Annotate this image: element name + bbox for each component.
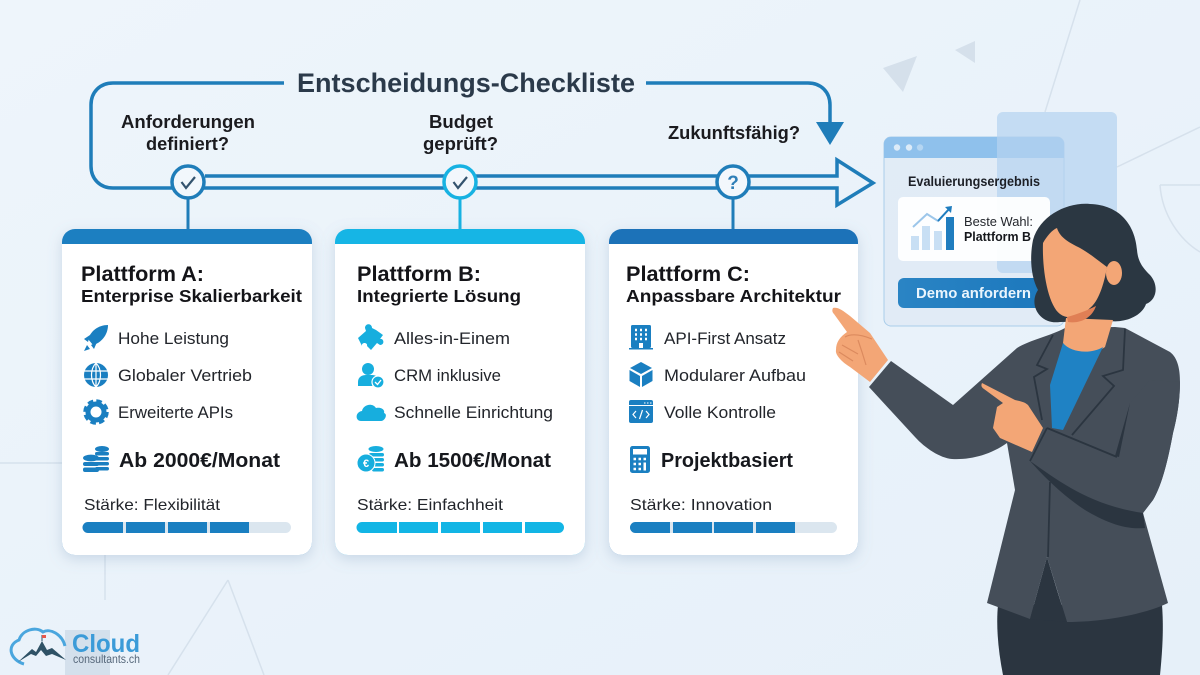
face [1043, 228, 1107, 317]
icon: globe [84, 363, 108, 387]
panel: Plattform C [609, 229, 858, 555]
feature list A: Globaler Vertrieb [118, 366, 252, 385]
icon: coins [83, 446, 109, 472]
icon: cloud with mountain [11, 629, 66, 664]
icon: euro coins: € [363, 458, 369, 470]
title: Entscheidungs-Checkliste [297, 68, 635, 98]
feature list B [394, 329, 553, 422]
jacket dart [1115, 403, 1130, 457]
flow: decision checklist [91, 68, 873, 230]
strength bar A [82, 522, 291, 533]
step 2: budget checked: geprüft? [423, 134, 498, 154]
jacket [869, 327, 1180, 622]
hair back [1031, 204, 1156, 322]
icon: euro coins [357, 446, 384, 472]
strength C: Stärke: Innovation [630, 497, 772, 514]
strength B: Stärke: Einfachheit [357, 497, 504, 514]
strength A: Stärke: Flexibilität [84, 497, 221, 514]
heading C: Plattform C: [626, 263, 750, 286]
feature list C: Modularer Aufbau [664, 366, 806, 385]
heading B: Integrierte Lösung [357, 286, 521, 306]
logo text: Cloud [72, 630, 140, 658]
feature list B: Alles-in-Einem [394, 329, 510, 348]
window heading: Evaluierungsergebnis [908, 174, 1040, 189]
button: Demo anfordern [916, 286, 1031, 302]
feature list B: Schnelle Einrichtung [394, 403, 553, 422]
heading A [81, 263, 302, 306]
step 1: requirements defined: definiert? [146, 134, 229, 154]
icon: puzzle [358, 324, 383, 350]
icon: rocket [84, 325, 108, 351]
logo text: consultants.ch [73, 652, 140, 666]
best choice text: Plattform B [964, 229, 1031, 244]
icon: calculator [630, 446, 650, 473]
heading C: Anpassbare Architektur [626, 286, 841, 306]
heading B: Plattform B: [357, 263, 481, 286]
feature list A: Hohe Leistung [118, 329, 229, 348]
panel: evaluation result window [884, 112, 1117, 326]
icon: user check [358, 363, 384, 388]
price C: Projektbasiert [661, 450, 793, 472]
icon: gear [85, 401, 107, 423]
step 1: requirements defined [121, 112, 255, 230]
icon: cloud [357, 405, 386, 421]
shirt [1050, 343, 1103, 430]
inner skirt wedge [1030, 557, 1067, 622]
feature list C: Volle Kontrolle [664, 403, 776, 422]
step 3: future proof [668, 123, 800, 230]
sleeve shadow [1030, 461, 1145, 528]
illustration: presenter [832, 204, 1180, 675]
panel: Plattform A [62, 229, 312, 555]
heading C [626, 263, 841, 306]
feature list C [664, 329, 806, 422]
forearm [1030, 380, 1180, 513]
panel: Plattform B [335, 229, 585, 555]
feature list C: API-First Ansatz [664, 329, 786, 348]
neck [1063, 318, 1113, 353]
strength bar B [356, 522, 564, 533]
pointing hand lower [981, 383, 1043, 452]
heading A: Enterprise Skalierbarkeit [81, 286, 302, 306]
step 2: budget checked [423, 112, 498, 230]
step 2: budget checked: Budget [429, 112, 493, 132]
feature list A: Erweiterte APIs [118, 403, 233, 422]
price A: Ab 2000€/Monat [119, 450, 280, 472]
heading B [357, 263, 521, 306]
feature list B: CRM inklusive [394, 366, 501, 385]
price B: Ab 1500€/Monat [394, 450, 551, 472]
step 3: future proof: ? [727, 173, 739, 194]
heading A: Plattform A: [81, 263, 204, 286]
step 3: future proof: Zukunftsfähig? [668, 123, 800, 143]
button [898, 278, 1048, 308]
icon: code window [629, 400, 653, 423]
best choice text: Beste Wahl: [964, 214, 1033, 229]
icon: cube [630, 362, 652, 387]
logo [11, 629, 140, 675]
skirt [997, 605, 1163, 675]
lapels [1034, 329, 1125, 557]
mini chart [911, 206, 954, 250]
pointing hand upper [832, 308, 888, 382]
step 1: requirements defined: Anforderungen [121, 112, 255, 132]
flow line with arrows [91, 83, 873, 205]
icon: building [629, 325, 653, 350]
feature list A [118, 329, 252, 422]
best choice text [964, 214, 1033, 244]
strength bar C [630, 522, 837, 533]
